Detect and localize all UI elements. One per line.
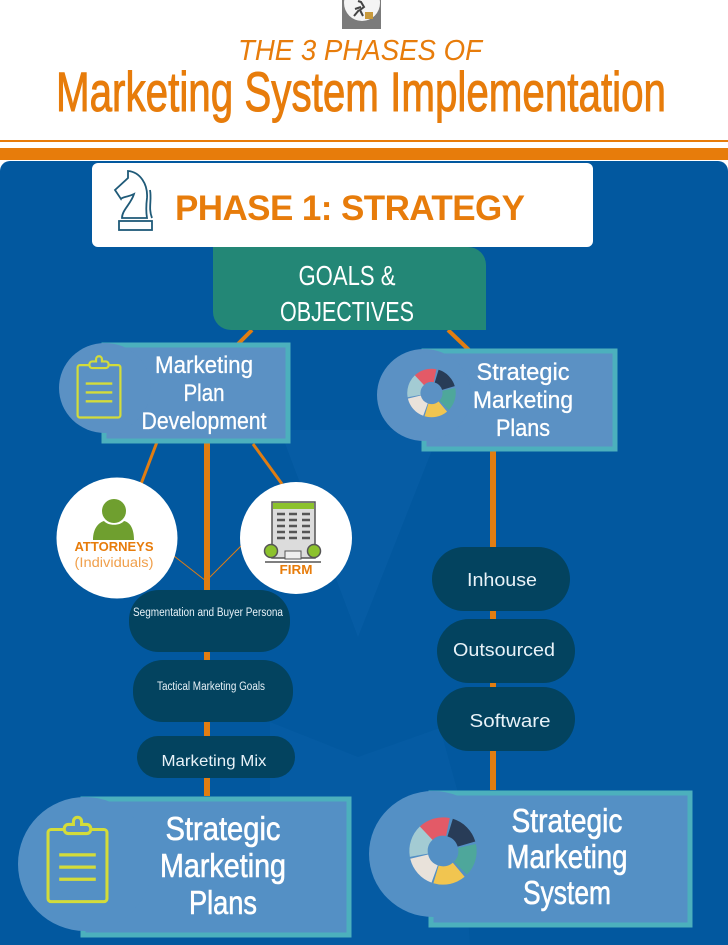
panel: marketing plan development — [59, 343, 288, 441]
pill: segmentation and buyer persona — [129, 590, 290, 652]
panel: strategic marketing plans (top) — [377, 349, 615, 449]
icon: cycle ring — [407, 368, 456, 418]
pill: outsourced — [437, 619, 575, 683]
panel: strategic marketing system: Strategic — [512, 802, 622, 839]
panel: strategic marketing system: Marketing — [506, 838, 628, 875]
panel: marketing plan development: Marketing — [155, 352, 253, 379]
icon: building — [264, 502, 321, 562]
pill: tactical marketing goals — [133, 660, 293, 722]
goals and objectives box: OBJECTIVES — [280, 296, 414, 327]
pill: software: Software — [470, 711, 550, 731]
firm circle: FIRM — [280, 563, 312, 577]
icon: chess knight — [115, 171, 152, 230]
pill: software — [437, 687, 575, 751]
pill: segmentation and buyer persona: Segmentation and Buyer Persona — [133, 607, 284, 619]
subtitle: THE 3 PHASES OF — [238, 35, 484, 67]
goals and objectives box: GOALS & — [298, 260, 396, 291]
pill: inhouse — [432, 547, 570, 611]
panel: strategic marketing system: System — [523, 874, 611, 911]
panel: strategic marketing plans (top): Strategic — [476, 359, 570, 386]
attorneys circle — [56, 478, 178, 598]
icon: clipboard — [78, 356, 120, 418]
panel: marketing plan development: Plan — [184, 380, 224, 407]
panel: strategic marketing plans (bottom): Marketing — [160, 847, 286, 884]
pill: outsourced: Outsourced — [453, 640, 555, 660]
phase heading: PHASE 1: STRATEGY — [175, 189, 525, 228]
panel: strategic marketing plans (bottom) — [18, 797, 349, 935]
icon: clipboard — [48, 817, 107, 902]
connector lines — [141, 330, 493, 796]
pill: marketing mix: Marketing Mix — [162, 753, 267, 770]
attorneys circle: ATTORNEYS — [74, 540, 154, 554]
logo icon — [342, 0, 381, 29]
attorneys circle: (Individuals) — [74, 554, 154, 570]
pill: inhouse: Inhouse — [467, 570, 537, 590]
panel: strategic marketing plans (bottom): Strategic — [166, 810, 280, 847]
panel: strategic marketing system — [369, 791, 690, 925]
panel: strategic marketing plans (bottom): Plans — [189, 884, 257, 921]
icon: cycle ring — [408, 816, 478, 886]
pill: marketing mix — [137, 736, 295, 778]
panel: strategic marketing plans (top): Plans — [496, 415, 550, 442]
panel: strategic marketing plans (top): Marketing — [473, 387, 573, 414]
pill: tactical marketing goals: Tactical Marketing Goals — [157, 681, 265, 693]
goals and objectives box — [213, 247, 486, 330]
panel: marketing plan development: Development — [142, 408, 267, 435]
phase 1 heading box — [92, 163, 593, 247]
orange divider bands — [0, 140, 728, 160]
firm circle — [240, 482, 352, 594]
icon: person — [93, 499, 134, 540]
